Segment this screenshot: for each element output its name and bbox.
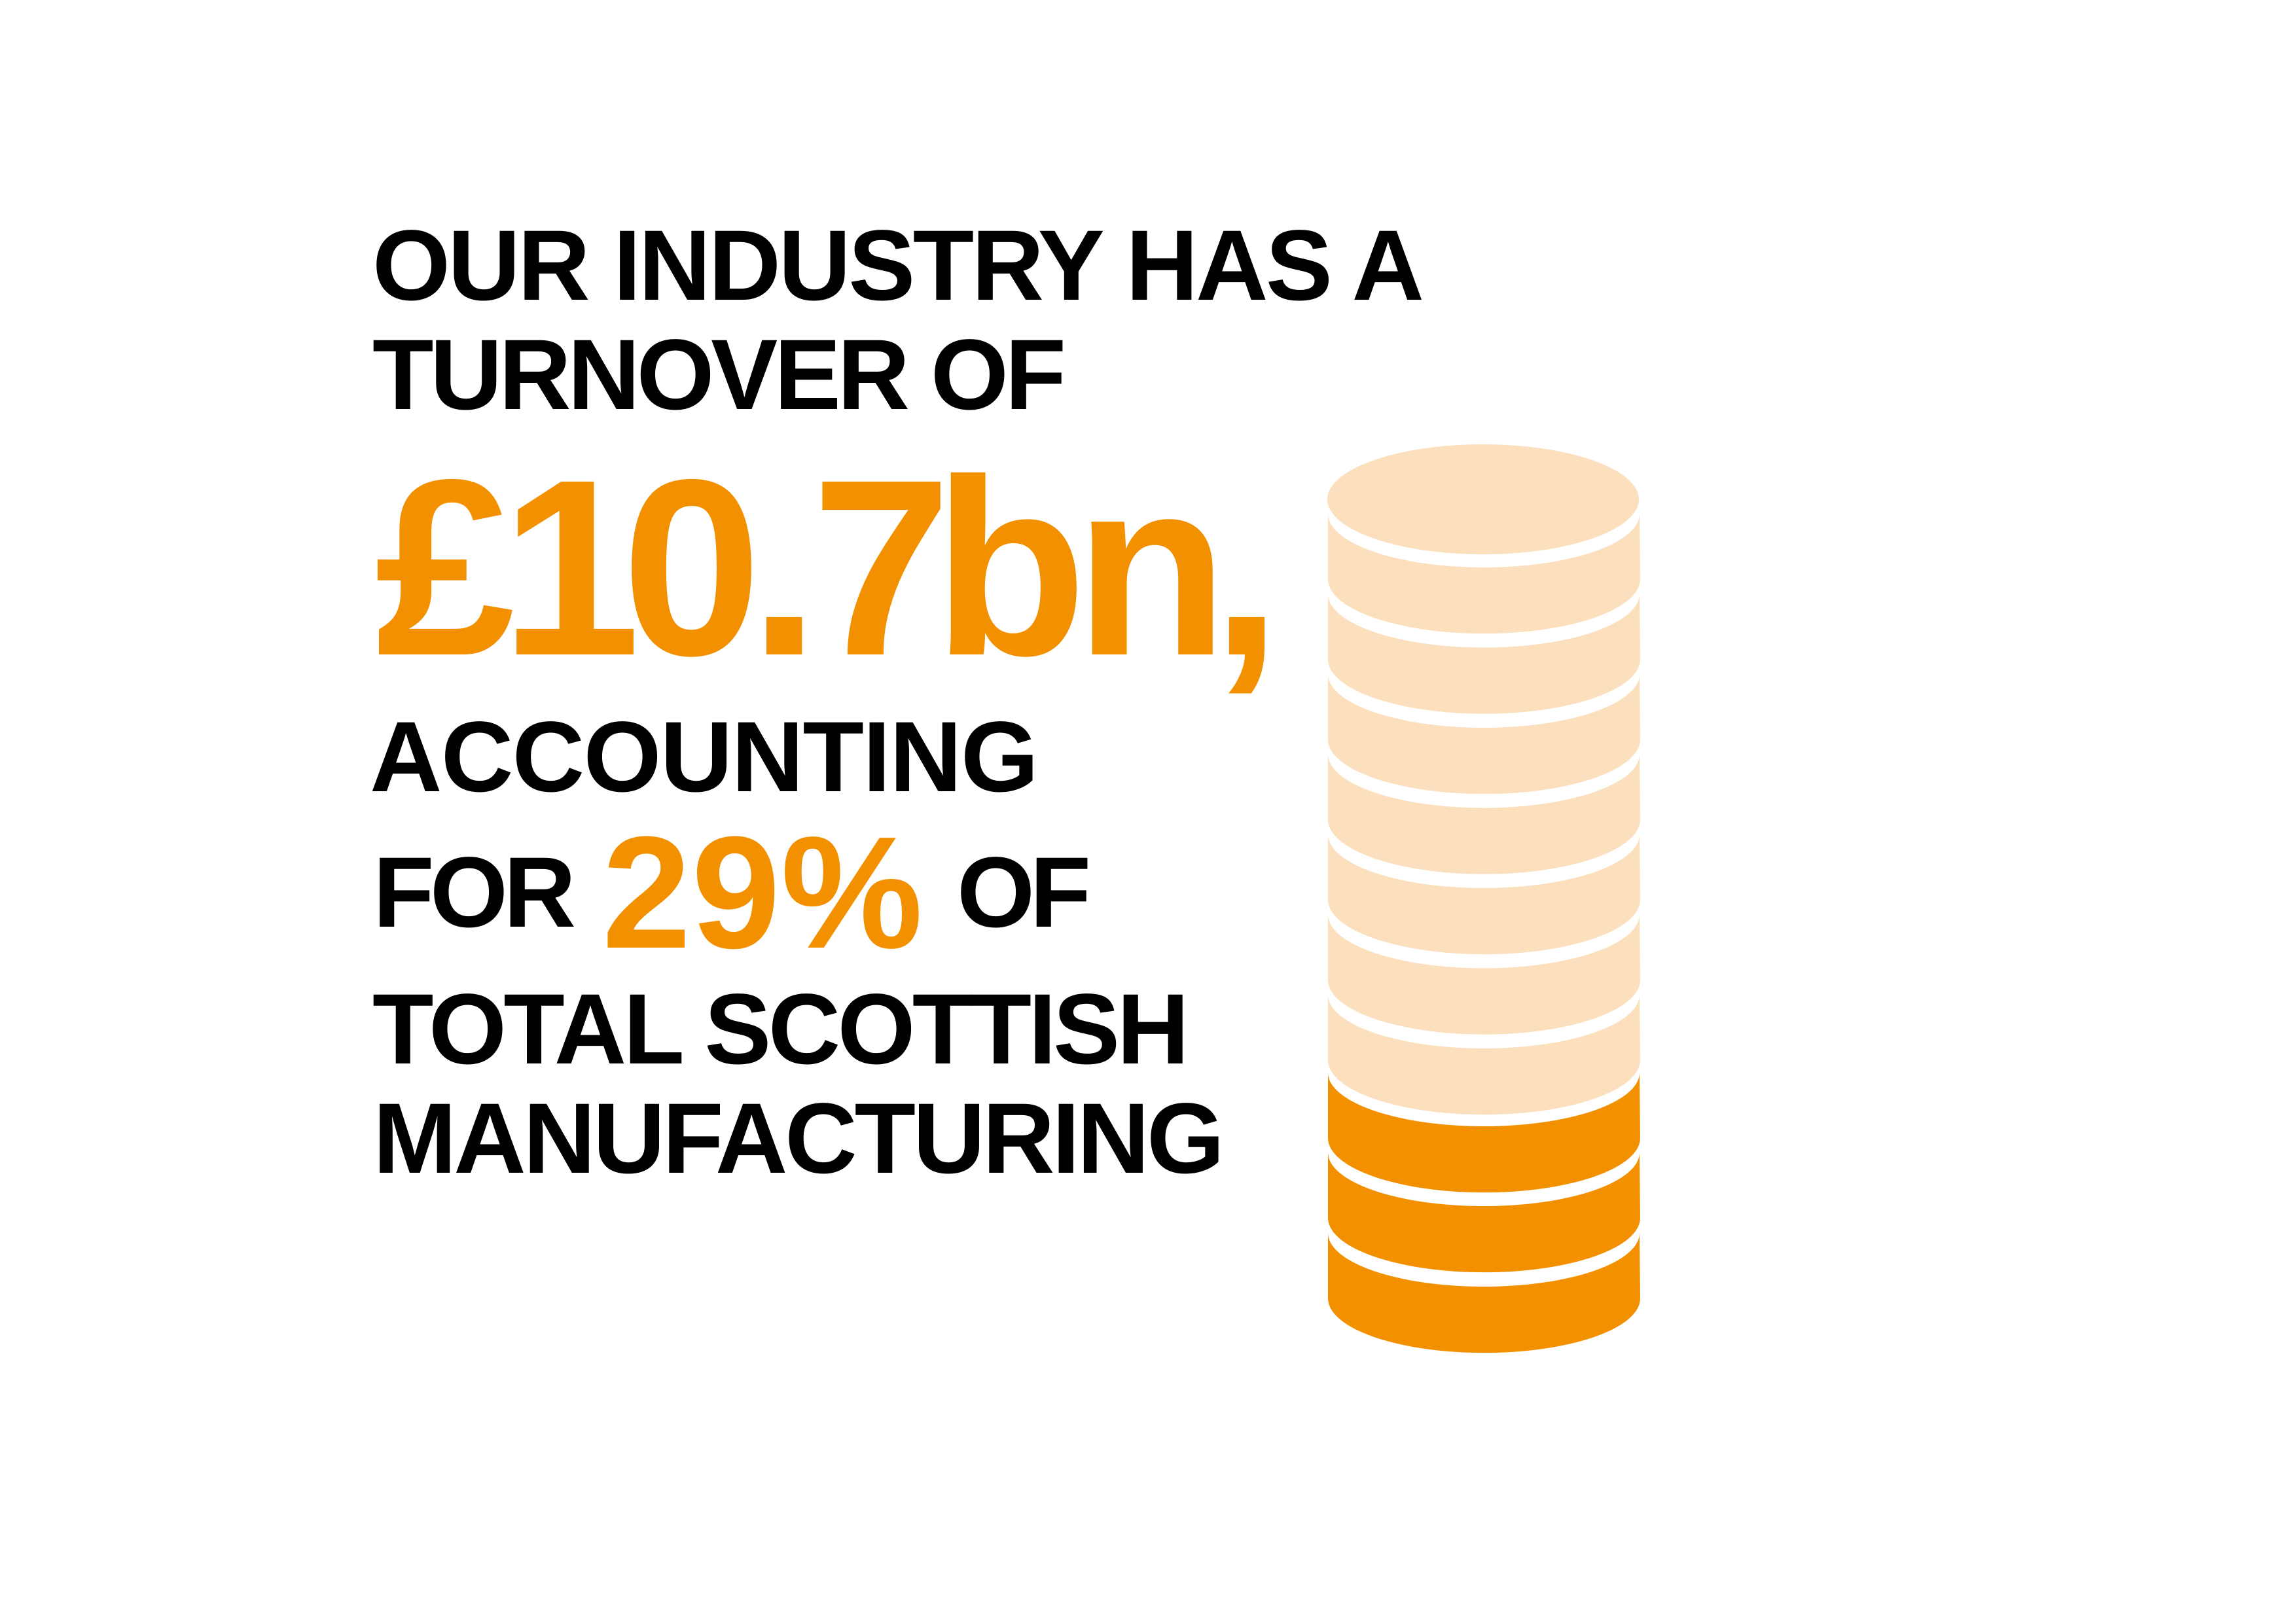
line: for: FOR — [373, 836, 576, 948]
coin stack: 29 percent shaded — [1327, 444, 1640, 1353]
line: manufacturing: MANUFACTURING — [373, 1082, 1225, 1194]
line: accounting: ACCOUNTING — [370, 701, 1039, 813]
big figure: £10.7bn: £10.7bn, — [375, 427, 1282, 708]
headline text — [370, 209, 1424, 1194]
light coins — [1328, 514, 1640, 1115]
line: of: OF — [957, 836, 1091, 948]
line: turnover of: TURNOVER OF — [372, 319, 1066, 431]
top coin face — [1327, 444, 1639, 554]
line: our industry has a: OUR INDUSTRY HAS A — [372, 209, 1424, 321]
orange coins — [1328, 1073, 1640, 1353]
figure: 29%: 29% — [602, 803, 923, 982]
line: total scottish: TOTAL SCOTTISH — [372, 973, 1189, 1085]
